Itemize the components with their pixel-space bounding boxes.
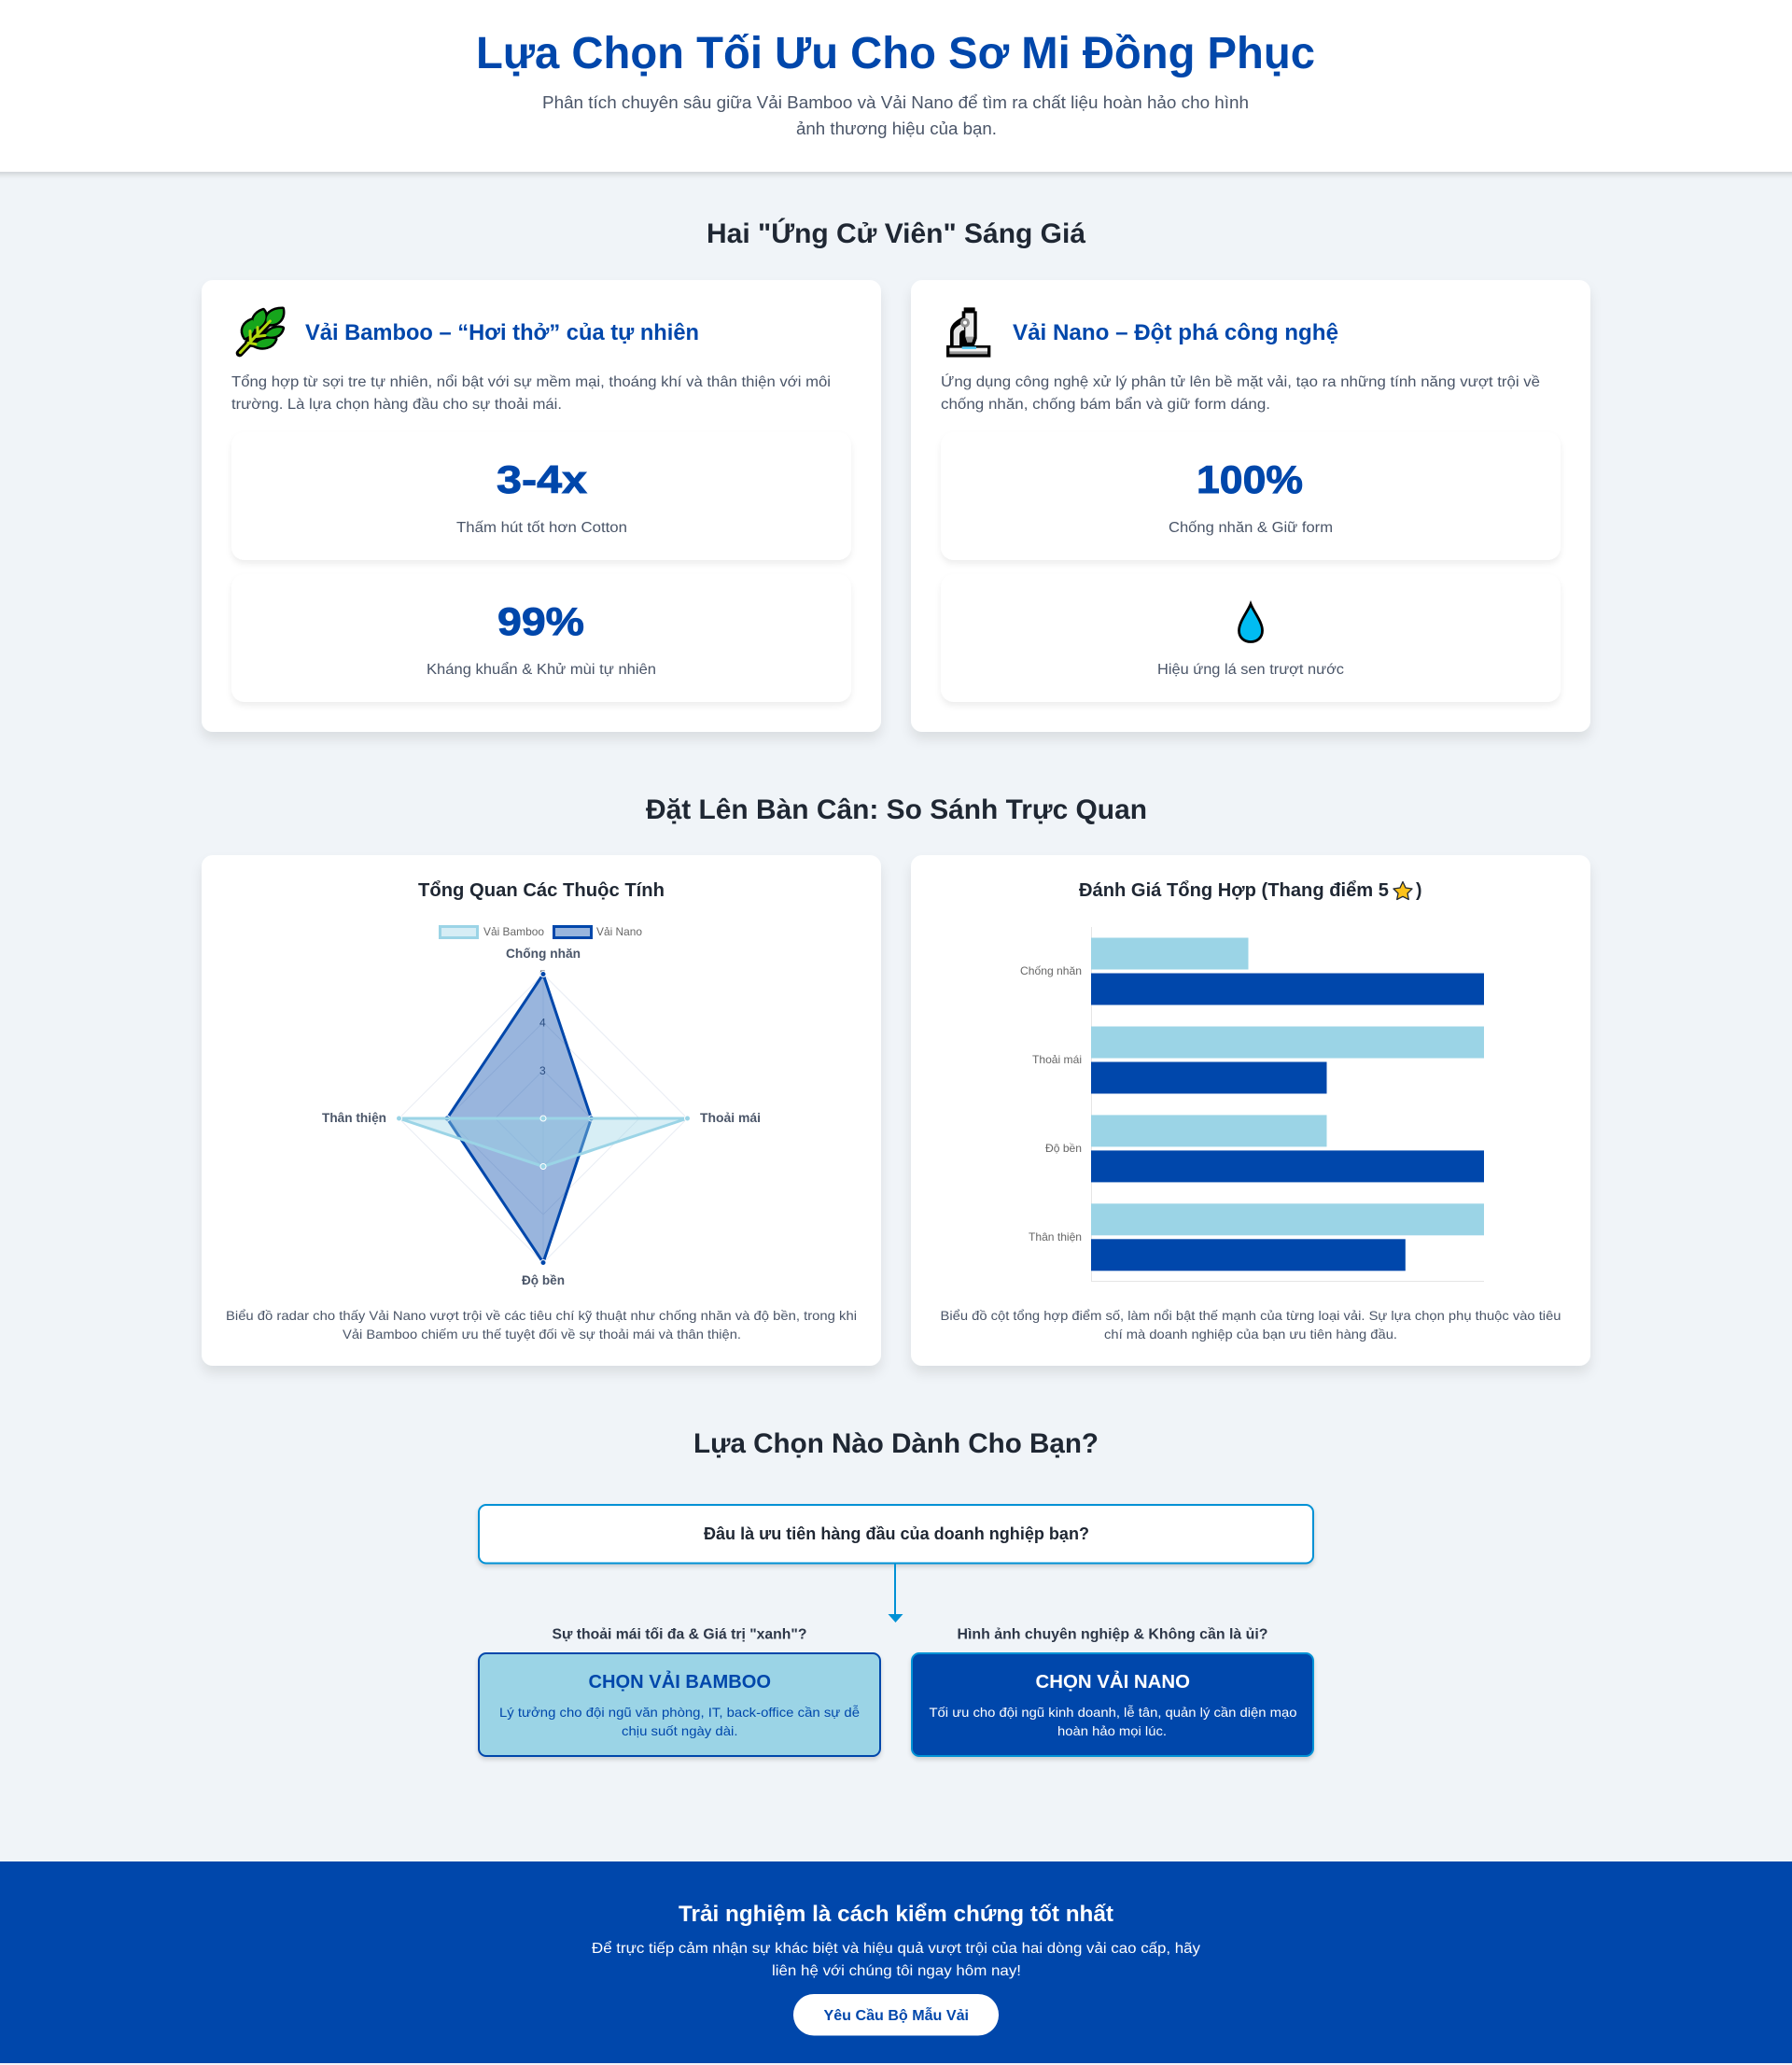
horizontal bars (1020, 927, 1484, 1281)
panel: bar chart (911, 855, 1590, 1366)
description: Ứng dụng công nghệ xử lý phân tử lên bề mặt vải, tạo ra những tính năng vượt trội về (941, 372, 1540, 390)
description: Tổng hợp từ sợi tre tự nhiên, nổi bật với sự mềm mại, thoáng khí và thân thiện với môi (231, 373, 831, 390)
description (941, 372, 1540, 413)
footer call to action (0, 1861, 1792, 2063)
chart caption: Vải Bamboo chiếm ưu thế tuyệt đối về sự thoải mái và thân thiện. (343, 1327, 741, 1342)
radar plot: Chống nhăn (506, 946, 581, 961)
chart title: Đánh Giá Tổng Hợp (Thang điểm 5 (1079, 880, 1389, 901)
subtitle: Phân tích chuyên sâu giữa Vải Bamboo và Vải Nano để tìm ra chất liệu hoàn hảo cho hình (542, 93, 1249, 112)
chart caption: Biểu đồ radar cho thấy Vải Nano vượt trội về các tiêu chí kỹ thuật như chống nhăn và độ bền, trong khi (226, 1308, 857, 1323)
radar plot: Thân thiện (322, 1110, 386, 1125)
icon: star (1393, 881, 1412, 900)
question box: Đâu là ưu tiên hàng đầu của doanh nghiệp bạn? (704, 1524, 1089, 1543)
question box (479, 1505, 1313, 1563)
section heading: comparison: Đặt Lên Bàn Cân: So Sánh Trực Quan (646, 794, 1147, 825)
panel: bar chart: ) (1416, 880, 1422, 901)
option: choose bamboo (479, 1653, 880, 1756)
description (231, 373, 831, 413)
chart caption (226, 1308, 857, 1342)
radar plot: Độ bền (522, 1272, 565, 1287)
subtitle (542, 93, 1249, 138)
Vải Bamboo series (396, 1116, 691, 1169)
footer text (592, 1940, 1200, 1979)
horizontal bars: Thân thiện (1029, 1230, 1082, 1243)
legend (441, 925, 642, 938)
card heading: Vải Bamboo – “Hơi thở” của tự nhiên (305, 320, 699, 345)
radar plot: Thoải mái (700, 1110, 761, 1125)
footer text: Để trực tiếp cảm nhận sự khác biệt và hiệu quả vượt trội của hai dòng vải cao cấp, hãy (592, 1940, 1200, 1957)
stat card: 100%: Chống nhăn & Giữ form (1169, 520, 1333, 536)
panel: Vải Nano (911, 280, 1590, 732)
decision flow (479, 1505, 1313, 1756)
stat card: 3-4x (231, 432, 851, 560)
chart caption: chí mà doanh nghiệp của bạn ưu tiên hàng đầu. (1104, 1327, 1397, 1342)
stat card: water drop (941, 574, 1561, 702)
header (0, 0, 1792, 172)
horizontal bars: Thoải mái (1032, 1053, 1082, 1066)
chart caption (941, 1308, 1561, 1342)
stat card: water drop: Hiệu ứng lá sen trượt nước (1157, 662, 1344, 678)
card heading: Vải Nano – Đột phá công nghệ (1013, 320, 1338, 345)
stat card: 100% (941, 432, 1561, 560)
button (793, 1994, 999, 2035)
option: choose bamboo: chịu suốt ngày dài. (622, 1723, 737, 1738)
icon: microscope (946, 307, 990, 358)
horizontal bars: Độ bền (1045, 1142, 1082, 1155)
stat card: 99%: Kháng khuẩn & Khử mùi tự nhiên (427, 661, 656, 678)
horizontal bars: Chống nhăn (1020, 964, 1082, 977)
icon: leaf (240, 309, 283, 353)
radar plot (322, 946, 761, 1287)
subtitle: ảnh thương hiệu của bạn. (796, 119, 997, 138)
description: chống nhăn, chống bám bẩn và giữ form dáng. (941, 396, 1270, 413)
stat card: 3-4x: Thấm hút tốt hơn Cotton (456, 520, 627, 536)
radar plot: 4 (539, 1016, 546, 1029)
section heading: candidates: Hai "Ứng Cử Viên" Sáng Giá (707, 218, 1085, 249)
option: choose nano: Tối ưu cho đội ngũ kinh doanh, lễ tân, quản lý cần diện mạo (930, 1705, 1297, 1720)
option: choose nano: CHỌN VẢI NANO (1036, 1671, 1190, 1693)
stat card: 99% (231, 574, 851, 702)
legend: Vải Nano (596, 925, 642, 938)
chart caption: Biểu đồ cột tổng hợp điểm số, làm nổi bật thế mạnh của từng loại vải. Sự lựa chọn phụ thuộc vào tiêu (941, 1308, 1561, 1323)
legend: Vải Bamboo (483, 925, 544, 938)
panel: radar chart (202, 855, 881, 1366)
footer text: liên hệ với chúng tôi ngay hôm nay! (772, 1963, 1021, 1979)
option label: nano: Hình ảnh chuyên nghiệp & Không cần là ủi? (958, 1626, 1267, 1643)
stat card: 99%: 99% (497, 599, 584, 643)
Vải Nano series (444, 971, 594, 1266)
icon: water drop (1239, 604, 1262, 642)
option: choose bamboo: CHỌN VẢI BAMBOO (588, 1671, 771, 1693)
footer heading: Trải nghiệm là cách kiểm chứng tốt nhất (679, 1902, 1113, 1927)
option: choose nano (912, 1653, 1313, 1756)
chart title: Tổng Quan Các Thuộc Tính (418, 880, 665, 901)
description: trường. Là lựa chọn hàng đầu cho sự thoải mái. (231, 397, 562, 413)
section heading: decision: Lựa Chọn Nào Dành Cho Bạn? (693, 1428, 1099, 1459)
option: choose bamboo: Lý tưởng cho đội ngũ văn phòng, IT, back-office cần sự dễ (499, 1705, 860, 1720)
option: choose nano: hoàn hảo mọi lúc. (1057, 1723, 1167, 1738)
arrow (889, 1564, 903, 1622)
stat card: 100%: 100% (1197, 457, 1303, 501)
panel: Vải Bamboo (202, 280, 881, 732)
stat card: 3-4x: 3-4x (497, 457, 588, 501)
button: Yêu Cầu Bộ Mẫu Vải (823, 2006, 969, 2024)
title: Lựa Chọn Tối Ưu Cho Sơ Mi Đồng Phục (476, 29, 1315, 78)
radar plot: 5 (539, 968, 546, 981)
option label: bamboo: Sự thoải mái tối đa & Giá trị "xanh"? (553, 1626, 806, 1643)
radar plot: 3 (539, 1064, 546, 1077)
